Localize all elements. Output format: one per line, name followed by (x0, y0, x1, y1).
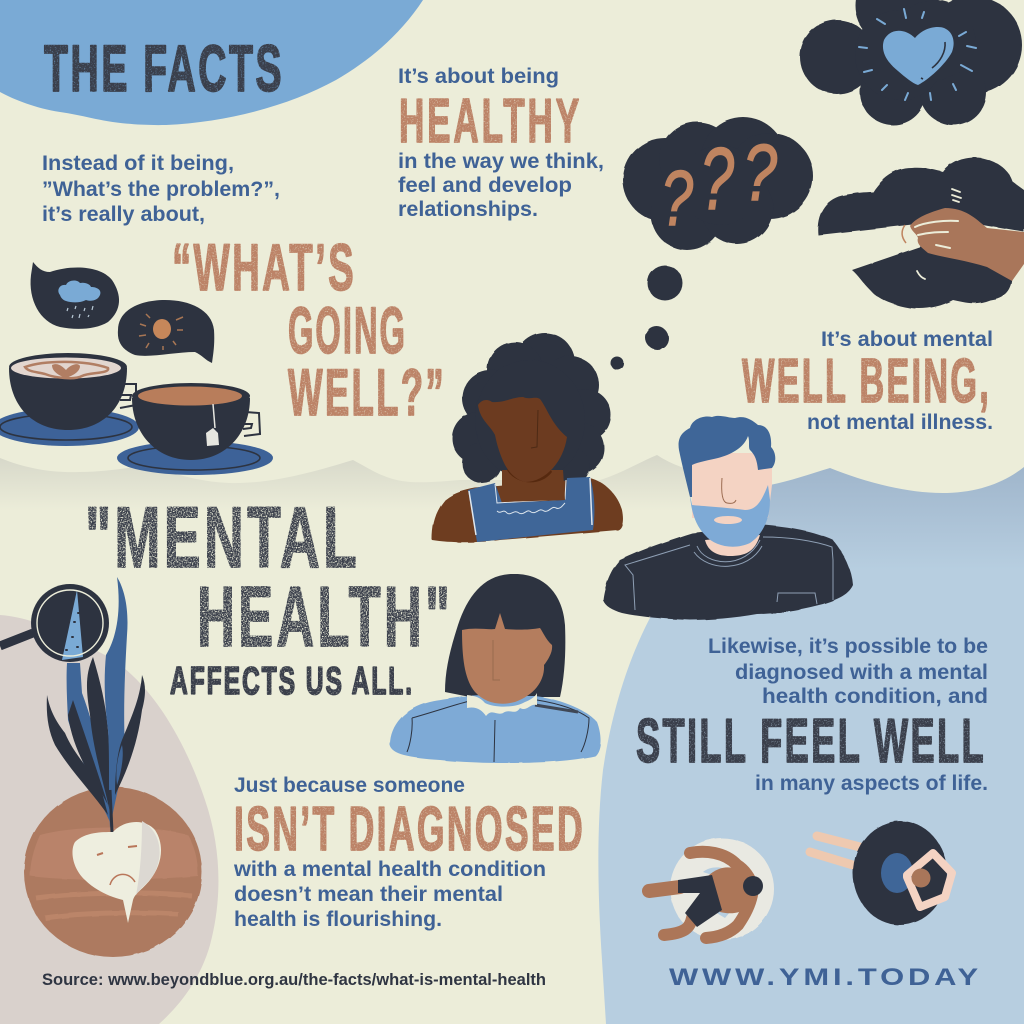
head (912, 868, 930, 888)
text block: instead of it being: ”What’s the problem?”, (42, 177, 280, 201)
text block: instead of it being (42, 151, 280, 226)
hair (452, 333, 611, 484)
text block: isn't diagnosed: with a mental health condition (233, 857, 546, 881)
panel: top-left blue blob (0, 0, 423, 125)
heading: mental health (85, 490, 453, 703)
text block: isn't diagnosed: health is flourishing. (234, 907, 442, 931)
icon: latte saucer (0, 408, 139, 446)
illustration: woman on dark float (810, 821, 952, 925)
face (462, 613, 552, 704)
hair (679, 416, 775, 497)
heading: isn't diagnosed: ISN’T DIAGNOSED (234, 795, 585, 864)
text block: isn't diagnosed: doesn’t mean their mental (234, 882, 503, 906)
earth circle (24, 787, 202, 957)
source: Source: www.beyondblue.org.au/the-facts/what-is-mental-health (42, 971, 546, 989)
sad heart (72, 821, 161, 923)
text block: mental well being: It’s about mental (821, 327, 993, 351)
heading: what's going well: GOING (288, 293, 407, 367)
leaves (47, 577, 145, 832)
heading: mental health: "MENTAL (85, 490, 360, 586)
face (478, 397, 567, 502)
face (692, 453, 772, 518)
icon: thought cloud with question marks: ? (743, 128, 777, 217)
panel: mauve blob (0, 615, 218, 1024)
heading: what's going well: “WHAT’S (172, 230, 356, 304)
collar (467, 693, 537, 716)
text block: instead of it being: it’s really about, (42, 202, 205, 226)
magnifier (0, 584, 109, 662)
icon: tea saucer (117, 441, 273, 475)
shirt (603, 525, 853, 620)
panel: grey wave band (0, 455, 700, 530)
icon: thought cloud with question marks (623, 117, 813, 250)
icon: tea cup (132, 383, 260, 460)
text block: about being healthy: feel and develop (398, 173, 572, 197)
text block: still feel well: Likewise, it’s possible to be (708, 634, 988, 658)
icon: thought cloud with question marks: ? (661, 154, 693, 242)
heading: what's going well: WELL?” (288, 355, 446, 429)
illustration: magnifying glass and plant with sad heart (0, 577, 202, 957)
hole (881, 853, 913, 893)
subheading: affects us all: AFFECTS US ALL. (170, 660, 414, 703)
illustration: man on white float (649, 838, 774, 940)
neck (705, 535, 760, 556)
text block: about being healthy (398, 64, 604, 221)
icon: thought cloud with question marks: ? (700, 129, 734, 228)
icon: latte cup (9, 353, 136, 430)
illustration: woman with bob hair (390, 574, 601, 763)
illustration: woman with curly hair (432, 333, 623, 542)
heading: what's going well (172, 230, 446, 429)
text block: still feel well: health condition, and (762, 684, 988, 708)
white ring (670, 838, 774, 940)
text block: about being healthy: in the way we think, (398, 149, 604, 173)
heading: mental health: HEALTH" (197, 570, 453, 665)
icon: torn cloud with hand (818, 158, 1024, 308)
text block: still feel well: diagnosed with a mental (735, 660, 988, 684)
text block: isn't diagnosed (233, 773, 585, 931)
icon: sun speech bubble (118, 300, 214, 363)
dark ring (853, 821, 947, 925)
shoulders (432, 478, 623, 542)
website url: WWW.YMI.TODAY (669, 964, 982, 991)
text block: about being healthy: It’s about being (398, 64, 559, 88)
shirt (390, 696, 601, 763)
text block: still feel well: in many aspects of life. (755, 771, 988, 795)
text block: isn't diagnosed: Just because someone (234, 773, 465, 797)
hair (445, 574, 565, 697)
body (649, 852, 763, 938)
text block: instead of it being: Instead of it being, (42, 151, 234, 175)
text block: mental well being: not mental illness. (807, 410, 993, 434)
beard (690, 478, 770, 547)
heading: healthy: HEALTHY (399, 87, 582, 156)
arms (907, 853, 952, 907)
panel: blue wave blob (598, 467, 1024, 1024)
title: THE FACTS (44, 31, 284, 105)
icon: two coffee cups with speech bubbles (0, 262, 273, 475)
icon: cloud with heart (800, 0, 1022, 125)
dress (468, 477, 594, 542)
text block: mental well being (742, 327, 993, 434)
icon: rain speech bubble (31, 262, 119, 329)
hole (703, 867, 730, 918)
text block: about being healthy: relationships. (398, 197, 538, 221)
text block: still feel well (636, 634, 988, 795)
legs (810, 836, 860, 866)
illustration: man with beard (603, 416, 853, 620)
icon: thought bubbles (610, 266, 682, 370)
